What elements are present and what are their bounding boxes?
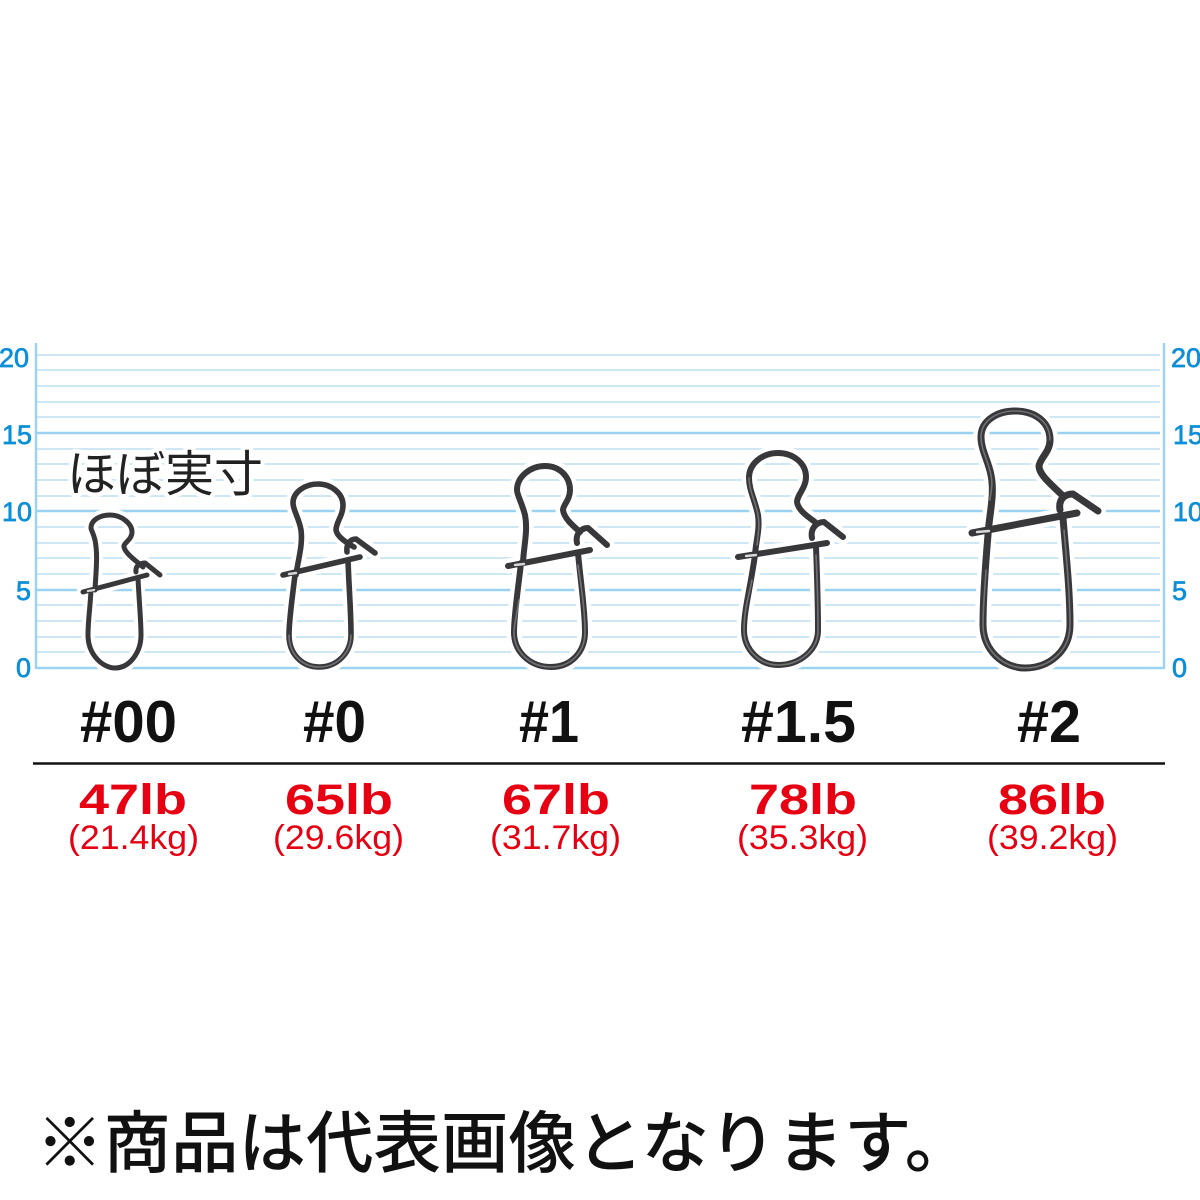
breaking strength in kilograms: (29.6kg) <box>273 819 404 857</box>
breaking strength in pounds: 67lb <box>502 776 610 824</box>
left axis labels: 5 <box>16 576 31 606</box>
breaking strength in pounds: 78lb <box>749 776 857 824</box>
actual size note: ほぼ実寸 <box>67 448 263 502</box>
left axis labels: 0 <box>16 653 31 683</box>
breaking strength in kilograms: (21.4kg) <box>68 819 199 857</box>
size labels: #1 <box>519 689 579 755</box>
snap #2 <box>972 411 1098 668</box>
snap #0 <box>283 484 375 667</box>
left axis labels: 15 <box>2 420 32 450</box>
size labels: #2 <box>1017 689 1081 755</box>
size labels: #00 <box>80 689 177 755</box>
breaking strength in kilograms: (35.3kg) <box>737 819 868 857</box>
snap #1 <box>508 466 607 667</box>
breaking strength in kilograms <box>68 819 1118 857</box>
right axis labels: 5 <box>1172 576 1187 606</box>
snap #00 <box>83 515 160 668</box>
snap #1.5 <box>738 453 843 665</box>
size labels: #0 <box>303 689 366 755</box>
left axis labels <box>0 343 32 683</box>
breaking strength in pounds: 47lb <box>79 776 187 824</box>
breaking strength in pounds <box>79 776 1106 824</box>
ruler grid <box>36 343 1164 669</box>
left axis labels: 10 <box>2 497 32 527</box>
breaking strength in kilograms: (39.2kg) <box>987 819 1118 857</box>
right axis labels: 0 <box>1172 653 1187 683</box>
breaking strength in pounds: 65lb <box>285 776 393 824</box>
size labels: #1.5 <box>741 689 856 755</box>
size labels <box>80 689 1081 755</box>
footnote: ※商品は代表画像となります。 <box>36 1107 972 1182</box>
breaking strength in kilograms: (31.7kg) <box>490 819 621 857</box>
breaking strength in pounds: 86lb <box>998 776 1106 824</box>
divider rule <box>33 762 1165 765</box>
right axis labels <box>1171 343 1200 683</box>
